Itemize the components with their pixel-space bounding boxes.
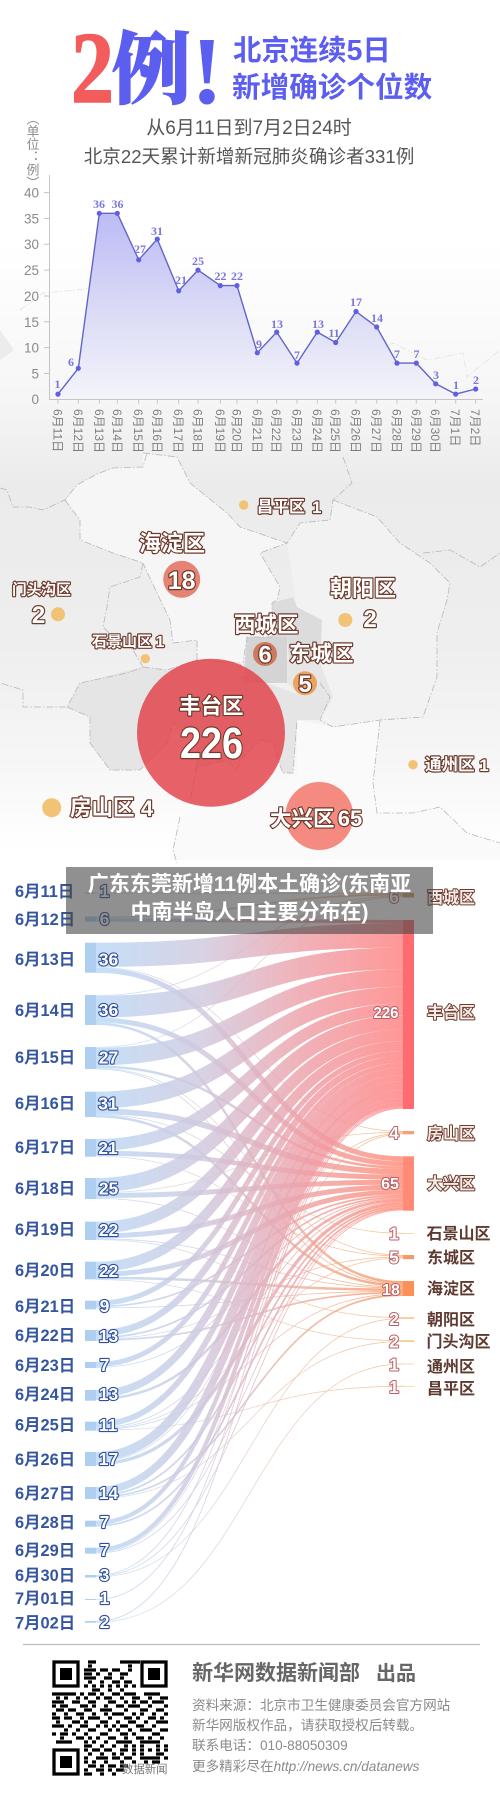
map labels: 大兴区 <box>270 807 335 831</box>
bubble: 门头沟区 <box>51 607 65 621</box>
footer text <box>192 1661 451 1774</box>
x axis date labels: 6月11日 <box>50 409 64 452</box>
data value labels: 13 <box>312 317 324 331</box>
left date labels: 6月15日 <box>15 1049 75 1067</box>
map labels: 2 <box>32 602 45 629</box>
bubble: 石景山区 <box>141 654 150 663</box>
x axis date labels: 6月15日 <box>131 409 145 453</box>
left value labels: 13 <box>99 1384 118 1404</box>
map labels: 东城区 <box>289 641 354 666</box>
y axis labels: 20 <box>24 289 39 304</box>
left value labels: 7 <box>100 1512 109 1532</box>
map labels: 通州区 <box>425 755 474 774</box>
left date labels: 7月02日 <box>15 1614 75 1632</box>
left date labels: 6月21日 <box>15 1298 75 1316</box>
data value labels: 25 <box>192 254 204 268</box>
left date labels: 6月24日 <box>15 1386 75 1404</box>
left date labels: 6月14日 <box>15 1002 75 1020</box>
x axis date labels: 6月21日 <box>250 409 264 453</box>
subtitle: 北京22天累计新增新冠肺炎确诊者331例 <box>84 146 414 167</box>
x axis date labels: 6月29日 <box>409 409 423 453</box>
data value labels: 36 <box>112 197 124 211</box>
left value labels: 1 <box>100 1588 110 1608</box>
data line <box>58 213 476 394</box>
data value labels: 1 <box>54 377 60 391</box>
data value labels: 13 <box>271 317 283 331</box>
QR code <box>52 1662 168 1776</box>
bubble: 房山区 <box>42 798 61 817</box>
subtitle <box>84 117 414 167</box>
data dots <box>55 211 478 397</box>
left value labels: 3 <box>100 1565 110 1585</box>
right district labels: 丰台区 <box>427 1003 475 1022</box>
data value labels: 1 <box>453 378 459 392</box>
footer heading: 新华网数据新闻部 <box>192 1661 360 1685</box>
left date labels: 6月23日 <box>15 1357 75 1375</box>
data value labels: 9 <box>256 337 262 351</box>
subtitle: 从6月11日到7月2日24时 <box>146 117 352 139</box>
right value labels: 6 <box>389 887 399 907</box>
x axis date labels: 6月26日 <box>348 409 362 453</box>
left value labels: 9 <box>100 1296 110 1316</box>
right value labels: 65 <box>381 1176 399 1193</box>
left date labels: 6月27日 <box>15 1485 75 1503</box>
right value labels: 1 <box>389 1354 399 1374</box>
left value labels <box>98 881 118 1632</box>
left value labels: 7 <box>100 1540 109 1560</box>
y axis labels: 25 <box>24 263 39 278</box>
left date labels: 6月12日 <box>15 911 75 929</box>
left value labels: 11 <box>99 1415 118 1435</box>
x axis date labels: 6月20日 <box>230 409 244 453</box>
data value labels: 14 <box>371 311 383 325</box>
data value labels: 3 <box>433 368 439 382</box>
right value labels: 4 <box>389 1123 399 1143</box>
left value labels: 31 <box>98 1094 118 1114</box>
data value labels <box>54 197 479 392</box>
left value labels: 6 <box>100 909 110 929</box>
x axis date labels: 6月16日 <box>150 409 164 453</box>
y axis labels <box>24 186 39 407</box>
data value labels: 21 <box>175 273 187 287</box>
title <box>71 12 433 125</box>
left value labels: 1 <box>100 881 110 901</box>
bubble: 丰台区 <box>137 659 285 807</box>
left value labels: 25 <box>99 1178 118 1198</box>
left date labels: 6月25日 <box>15 1416 75 1434</box>
data value labels: 22 <box>214 269 226 283</box>
data value labels: 22 <box>231 269 243 283</box>
x axis date labels: 6月14日 <box>110 409 124 453</box>
bubble: 海淀区 <box>163 561 200 598</box>
left date labels: 6月11日 <box>15 883 74 901</box>
sankey flows <box>96 893 403 1622</box>
map labels: 6 <box>258 642 272 668</box>
QR caption: 数据新闻 <box>122 1762 168 1776</box>
left date labels: 6月22日 <box>15 1327 75 1345</box>
footer heading suffix: 出品 <box>376 1662 416 1685</box>
left date labels: 6月17日 <box>15 1139 75 1157</box>
data value labels: 11 <box>328 326 340 340</box>
x axis date labels: 6月18日 <box>190 409 204 453</box>
left value labels: 22 <box>99 1220 118 1240</box>
data value labels: 31 <box>151 224 163 238</box>
bubble: 东城区 <box>293 671 317 695</box>
x axis date labels: 6月17日 <box>171 409 185 453</box>
x axis date labels: 6月27日 <box>369 409 383 453</box>
x axis date labels: 6月13日 <box>92 409 106 453</box>
right district labels <box>426 888 491 1398</box>
x axis date labels: 6月28日 <box>390 409 404 453</box>
map labels: 226 <box>180 719 243 768</box>
left value labels: 27 <box>99 1048 118 1068</box>
left value labels: 2 <box>100 1612 110 1632</box>
bubble: 大兴区 <box>285 782 353 850</box>
left value labels: 21 <box>98 1138 118 1158</box>
footer divider <box>23 1644 480 1646</box>
right value labels <box>374 887 400 1397</box>
left date labels: 6月16日 <box>15 1095 75 1113</box>
left value labels: 17 <box>99 1449 118 1469</box>
x axis date labels: 6月25日 <box>328 409 342 453</box>
axes <box>44 175 483 404</box>
x axis date labels: 6月22日 <box>269 409 283 453</box>
map labels: 西城区 <box>234 612 299 637</box>
left date labels: 6月26日 <box>15 1451 75 1469</box>
map labels: 石景山区 <box>92 634 152 650</box>
source line: 资料来源：北京市卫生健康委员会官方网站 <box>192 1697 451 1713</box>
title number 2: 2 <box>71 12 114 125</box>
y axis labels: 10 <box>24 340 39 356</box>
y axis labels: 35 <box>24 212 39 226</box>
caption overlay: 广东东莞新增11例本土确诊(东南亚 <box>88 873 411 896</box>
right district labels: 通州区 <box>427 1358 475 1376</box>
title character 例: 例 <box>112 28 191 115</box>
caption overlay: 中南半岛人口主要分布在) <box>130 901 368 924</box>
y axis labels: 30 <box>24 237 39 252</box>
left date labels: 6月13日 <box>15 951 75 969</box>
map background <box>0 240 500 863</box>
data value labels: 7 <box>394 347 400 361</box>
data value labels: 36 <box>93 197 105 211</box>
x axis date labels: 6月23日 <box>290 409 304 453</box>
right district labels: 朝阳区 <box>427 1311 475 1329</box>
bubble: 昌平区 <box>239 500 248 510</box>
map labels: 1 <box>156 634 165 651</box>
right district nodes <box>403 893 414 1387</box>
unit label: （单位：例） <box>24 112 40 189</box>
right value labels: 226 <box>374 1005 399 1022</box>
map labels: 丰台区 <box>179 694 244 718</box>
left date labels: 6月30日 <box>15 1567 75 1585</box>
bubble: 朝阳区 <box>338 613 352 627</box>
left date labels: 7月01日 <box>15 1590 75 1608</box>
y axis labels: 0 <box>31 392 39 407</box>
left date labels: 6月19日 <box>15 1221 75 1239</box>
x axis date labels: 6月12日 <box>71 409 85 453</box>
data value labels: 6 <box>68 355 74 369</box>
map labels: 门头沟区 <box>12 580 71 598</box>
right district labels: 石景山区 <box>426 1225 491 1243</box>
data value labels: 2 <box>473 373 479 387</box>
left date nodes <box>85 892 96 1623</box>
left value labels: 36 <box>99 1000 118 1020</box>
map labels: 2 <box>363 606 377 633</box>
right value labels: 1 <box>389 1377 399 1397</box>
map labels: 1 <box>312 498 321 517</box>
map labels <box>12 498 489 831</box>
map labels: 1 <box>479 756 489 775</box>
left date labels: 6月28日 <box>15 1514 75 1532</box>
map labels: 朝阳区 <box>330 576 396 601</box>
y axis labels: 40 <box>24 186 39 200</box>
left date labels: 6月20日 <box>15 1262 75 1280</box>
title exclamation: ! <box>191 17 223 124</box>
caption overlay <box>66 867 433 934</box>
left value labels: 36 <box>99 950 118 970</box>
left value labels: 14 <box>99 1483 118 1503</box>
map labels: 海淀区 <box>139 531 205 556</box>
right district labels: 房山区 <box>427 1124 475 1143</box>
data value labels: 7 <box>414 347 420 361</box>
map bubbles <box>42 500 418 850</box>
map labels: 昌平区 <box>257 498 305 516</box>
data value labels: 27 <box>134 242 146 256</box>
copyright line: 新华网版权作品，请获取授权后转载。 <box>192 1717 423 1733</box>
right value labels: 2 <box>389 1309 399 1329</box>
y axis labels: 15 <box>24 315 39 330</box>
right district labels: 昌平区 <box>427 1380 475 1398</box>
map labels: 18 <box>168 567 196 595</box>
right district labels: 东城区 <box>427 1248 475 1267</box>
x axis date labels: 6月24日 <box>310 409 324 453</box>
right district labels: 海淀区 <box>427 1279 475 1298</box>
left date labels <box>15 883 75 1632</box>
title line 1: 北京连续5日 <box>233 35 391 67</box>
x axis date labels: 7月2日 <box>468 409 482 446</box>
title line 2: 新增确诊个位数 <box>232 71 433 104</box>
bubble: 通州区 <box>408 760 418 769</box>
website line: 更多精彩尽在http://news.cn/datanews <box>192 1758 420 1774</box>
x axis date labels: 6月30日 <box>428 409 442 453</box>
left value labels: 7 <box>100 1355 109 1375</box>
bubble: 西城区 <box>253 642 277 666</box>
chart area <box>58 213 476 399</box>
x axis date labels: 7月1日 <box>448 409 462 446</box>
right value labels: 2 <box>389 1332 399 1352</box>
map labels: 房山区 <box>70 796 135 820</box>
x axis date labels: 6月19日 <box>213 409 227 453</box>
right district labels: 门头沟区 <box>426 1332 491 1351</box>
left value labels: 22 <box>99 1261 118 1281</box>
data value labels: 17 <box>350 295 362 309</box>
left value labels: 13 <box>99 1326 118 1346</box>
right district labels: 西城区 <box>427 888 475 907</box>
contact line: 联系电话：010-88050309 <box>192 1738 348 1753</box>
map labels: 4 <box>141 796 154 821</box>
line chart <box>24 175 483 453</box>
left date labels: 6月29日 <box>15 1542 75 1560</box>
data value labels: 7 <box>294 348 300 362</box>
left date labels: 6月18日 <box>15 1180 75 1198</box>
map labels: 5 <box>298 671 312 698</box>
sankey chart <box>15 881 491 1632</box>
right value labels: 5 <box>389 1248 399 1268</box>
right value labels: 18 <box>382 1282 400 1299</box>
right district labels: 大兴区 <box>427 1175 475 1193</box>
right value labels: 1 <box>389 1224 399 1244</box>
x axis date labels <box>50 409 482 453</box>
map labels: 65 <box>338 806 362 831</box>
y axis labels: 5 <box>31 366 39 382</box>
